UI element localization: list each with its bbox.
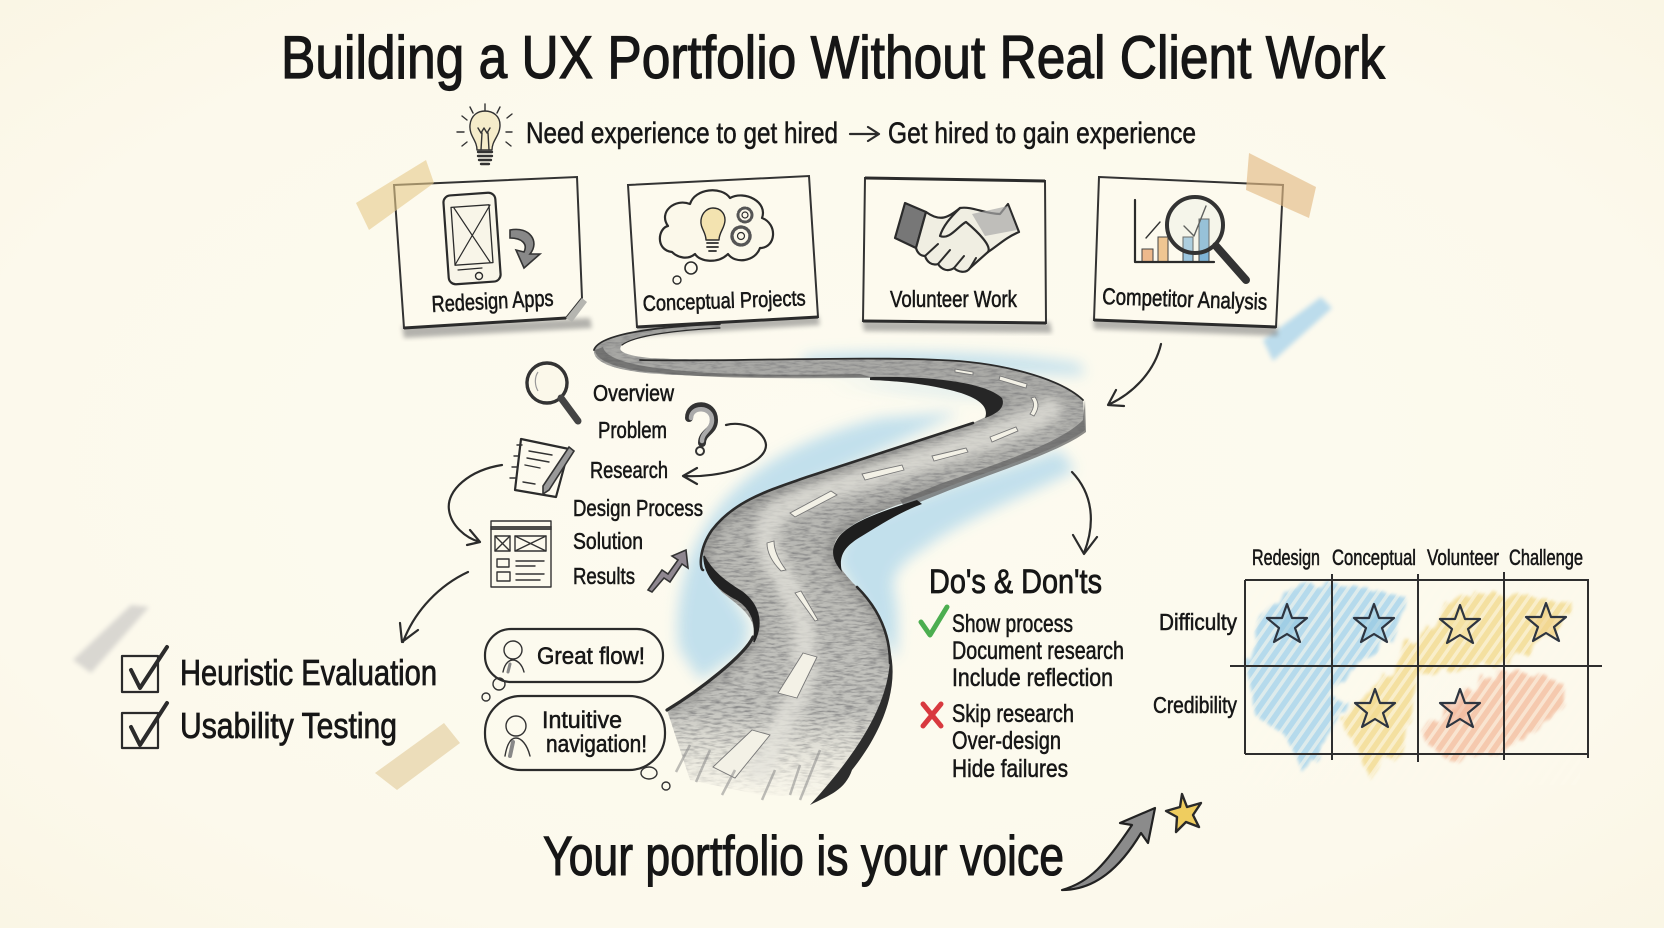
icon: red cross: [923, 704, 941, 726]
icon: checkbox 1: [122, 647, 167, 692]
icon: redesign curved arrow: [510, 229, 540, 268]
text: Problem: Problem: [598, 417, 667, 443]
text: Design Process: Design Process: [573, 495, 703, 521]
road center highlight: [760, 410, 1050, 770]
road side thickness: [900, 400, 1086, 508]
tape: tan: [375, 723, 460, 790]
lane dashes: [713, 369, 1038, 778]
top band shading: [595, 347, 873, 378]
subtitle with lightbulb: [457, 104, 1196, 164]
icon: handshake: [895, 203, 1019, 272]
crayon streak texture: [1240, 580, 1580, 785]
text: Overview: Overview: [593, 380, 674, 406]
text: Usability Testing: Usability Testing: [180, 705, 397, 746]
row label: Credibility: Credibility: [1153, 692, 1237, 718]
watercolor water around road: [677, 352, 1085, 680]
panel: Volunteer Work: [862, 178, 1052, 333]
subtitle text right: Get hired to gain experience: [888, 117, 1196, 150]
subtitle text left: Need experience to get hired: [526, 117, 838, 150]
road edge lines: [594, 324, 1083, 710]
icon: lightbulb: [457, 104, 512, 164]
arrow: rising pencil arrow: [1062, 808, 1155, 890]
road inner edge shading: [667, 398, 1000, 710]
text: over-design: Over-design: [952, 727, 1061, 755]
text: Great flow: Great flow!: [537, 643, 645, 670]
tape: top right: [1246, 153, 1316, 218]
text: Results: Results: [573, 563, 635, 589]
arrow: problem to research: [683, 424, 766, 484]
text: skip research: Skip research: [952, 700, 1074, 728]
blue brush stroke by card 4: [1263, 297, 1332, 361]
column header: Conceptual: Conceptual: [1332, 545, 1416, 570]
row label: Difficulty: Difficulty: [1159, 609, 1237, 635]
road bottom pencil streaks: [676, 745, 820, 800]
column header: Challenge: Challenge: [1509, 545, 1583, 570]
label: Volunteer Work: Volunteer Work: [890, 286, 1017, 312]
checklist: [122, 647, 437, 748]
do's and don'ts: [921, 563, 1124, 783]
icon: user 2: [505, 716, 530, 756]
icon: rising arrow: [648, 550, 688, 592]
speech bubble: great flow: [482, 629, 663, 701]
shadow crescents: [870, 377, 1003, 418]
icon: notebook and pencil: [510, 439, 574, 497]
icon: phone wireframe: [443, 192, 501, 285]
column header: Volunteer: Volunteer: [1427, 545, 1499, 570]
icon: green check: [921, 607, 947, 635]
arrow: wireframe to checklist: [400, 572, 468, 642]
arrow: from competitor analysis to road: [1108, 344, 1161, 406]
road surface: [594, 324, 1085, 797]
footer tagline: Your portfolio is your voice: [543, 824, 1064, 887]
icon: gold star: [1166, 794, 1201, 832]
arrow: research to design: [449, 465, 502, 545]
crayon shading: [1247, 583, 1573, 780]
icon: user 1: [503, 641, 524, 672]
panel: Conceptual Projects: [628, 176, 820, 336]
icon: bar chart with magnifier: [1135, 197, 1246, 280]
label: Competitor Analysis: Competitor Analysis: [1102, 283, 1268, 315]
text: hide failures: Hide failures: [952, 755, 1068, 783]
heading: Do's & Don'ts: [929, 563, 1102, 601]
column header: Redesign: Redesign: [1252, 545, 1320, 570]
icon: magnifying glass: [527, 363, 578, 421]
text: show process: Show process: [952, 610, 1073, 638]
text: navigation: navigation!: [546, 731, 647, 758]
icon: checkbox 2: [122, 703, 167, 748]
label: Redesign Apps: Redesign Apps: [431, 285, 554, 317]
stars: [1267, 603, 1566, 727]
icon: thought cloud with bulb and gears: [660, 190, 773, 284]
grid lines: [1230, 572, 1602, 762]
text: include reflection: Include reflection: [952, 664, 1113, 692]
panel: Redesign Apps: [394, 177, 592, 338]
panel: Competitor Analysis: [1093, 177, 1283, 336]
icon: question mark: [689, 406, 714, 455]
tape: gray: [73, 605, 149, 673]
text: Research: Research: [590, 457, 668, 483]
arrow between phrases: [850, 127, 879, 141]
speech bubble: intuitive navigation: [485, 696, 670, 790]
comparison matrix: [1153, 545, 1602, 785]
title: Building a UX Portfolio Without Real Client Work: [281, 24, 1386, 91]
text: Solution: Solution: [573, 528, 643, 554]
text: document research: Document research: [952, 637, 1124, 665]
road: [594, 324, 1086, 805]
case study outline: [400, 363, 766, 642]
text: Intuitive: Intuitive: [542, 707, 622, 734]
icon: wireframe page: [491, 521, 551, 587]
arrow: from road to do's and don'ts: [1072, 472, 1097, 554]
label: Conceptual Projects: Conceptual Projects: [642, 285, 806, 316]
tape: top left: [356, 160, 434, 230]
text: Heuristic Evaluation: Heuristic Evaluation: [180, 652, 437, 693]
